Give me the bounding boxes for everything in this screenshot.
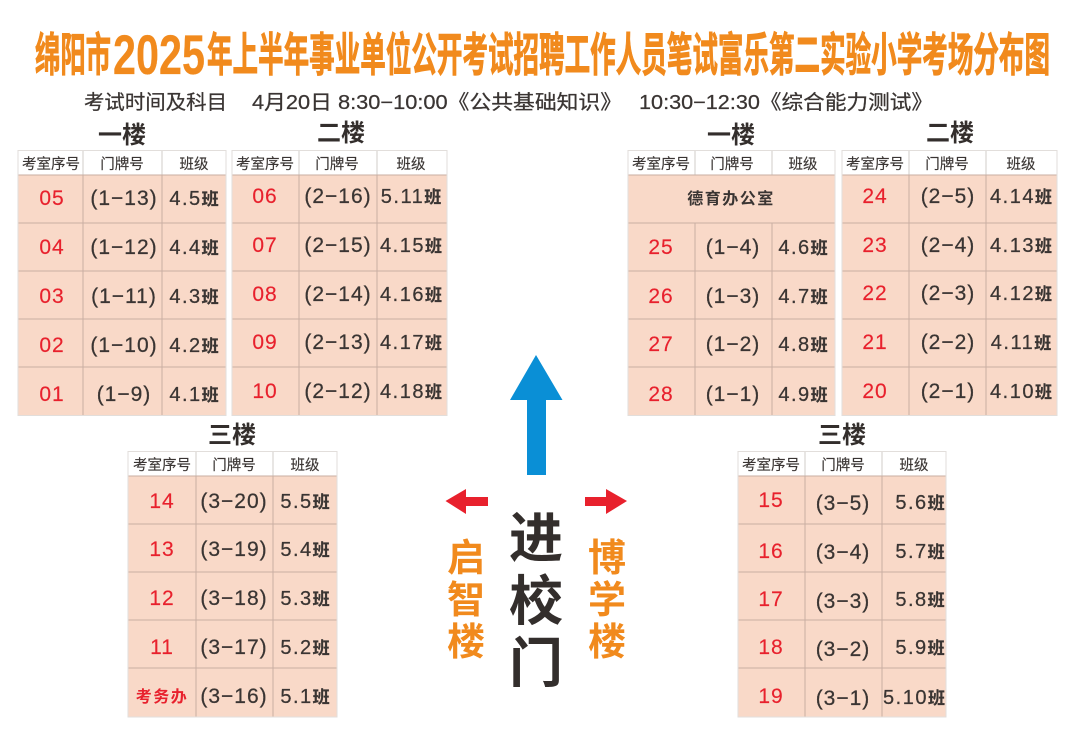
table: floor 1 rooms: 4.1班	[169, 381, 219, 406]
table: floor 2 rooms: 10	[252, 380, 278, 403]
table: floor 2 rooms: 08	[252, 283, 278, 306]
label: school gate: 门	[509, 619, 563, 698]
heading: floor 2: 二楼	[317, 113, 365, 148]
table: floor 2 rooms: (2−12)	[304, 380, 372, 403]
table: floor 3 rooms: 5.8班	[895, 586, 945, 611]
exam time and subjects	[84, 91, 933, 114]
table: floor 3 rooms: 17	[758, 588, 784, 611]
table: floor 3 rooms: 11	[150, 636, 174, 659]
table: floor 3 rooms: 13	[149, 538, 175, 561]
table: floor 2 rooms: 23	[862, 234, 888, 257]
table: floor 1 rooms: (1−4)	[706, 236, 760, 259]
table: floor 3 rooms: 14	[149, 490, 175, 513]
title: 绵阳市	[35, 19, 111, 85]
table: floor 1 rooms: 4.2班	[169, 332, 219, 357]
table: floor 3 rooms: 18	[758, 636, 784, 659]
table: floor 3 rooms: 5.9班	[895, 634, 945, 659]
table: floor 2 rooms: 24	[862, 185, 888, 208]
table: floor 1 rooms: (1−3)	[706, 285, 760, 308]
table: floor 3 rooms: (3−19)	[200, 538, 268, 561]
table: floor 3 rooms: 16	[758, 540, 784, 563]
table: floor 3 rooms: 门牌号	[821, 454, 865, 475]
table: floor 1 rooms: 25	[648, 236, 674, 259]
label: Qizhi building	[447, 527, 485, 666]
table: floor 2 rooms: 4.15班	[380, 232, 442, 257]
table: floor 1 rooms: (1−2)	[706, 333, 760, 356]
panel: east building floor 3	[738, 415, 946, 717]
title: 2025	[113, 23, 205, 86]
table: floor 3 rooms: 考务办	[136, 683, 188, 707]
table: floor 2 rooms: (2−5)	[921, 185, 975, 208]
table: floor 3 rooms: (3−1)	[816, 687, 870, 710]
table: floor 1 rooms: 班级	[788, 153, 818, 174]
table: floor 2 rooms	[232, 150, 447, 416]
label: Qizhi building: 楼	[447, 611, 485, 666]
table: floor 2 rooms: 22	[862, 282, 888, 305]
table: floor 2 rooms: 21	[862, 331, 888, 354]
exam time and subjects: 考试时间及科目	[84, 91, 227, 114]
table: floor 3 rooms: 考室序号	[742, 454, 800, 475]
table: floor 1 rooms: 班级	[180, 153, 208, 174]
table: floor 1 rooms: 4.8班	[778, 331, 828, 356]
table: floor 2 rooms: 4.11班	[991, 329, 1051, 354]
table: floor 1 rooms: 26	[648, 285, 674, 308]
table: floor 3 rooms: (3−3)	[816, 590, 870, 613]
table: floor 1 rooms: (1−1)	[706, 383, 760, 406]
panel: east building floor 1	[628, 115, 835, 416]
table: floor 1 rooms: (1−13)	[90, 187, 158, 210]
table: floor 3 rooms: 考室序号	[133, 454, 191, 475]
label: school gate: 校	[509, 557, 563, 636]
table: floor 2 rooms: 4.13班	[990, 232, 1052, 257]
panel: west building floor 1	[18, 115, 226, 416]
table: floor 3 rooms: 班级	[290, 454, 320, 475]
table: floor 3 rooms: 12	[149, 587, 175, 610]
panel: west building floor 3	[128, 415, 337, 717]
table: floor 3 rooms: (3−2)	[816, 638, 870, 661]
label: Qizhi building: 智	[447, 569, 485, 624]
heading: floor 1: 一楼	[707, 115, 755, 150]
table: floor 1 rooms: 考室序号	[632, 153, 690, 174]
table: floor 1 rooms: (1−12)	[90, 236, 158, 259]
table: floor 2 rooms: 4.14班	[990, 183, 1052, 208]
table: floor 2 rooms: 门牌号	[925, 153, 969, 174]
table: floor 3 rooms: 5.2班	[280, 634, 330, 659]
table: floor 2 rooms: 07	[252, 234, 278, 257]
table: floor 2 rooms: 09	[252, 331, 278, 354]
table: floor 1 rooms: 门牌号	[100, 153, 144, 174]
table: floor 3 rooms: 5.10班	[883, 684, 945, 709]
table: floor 3 rooms: (3−5)	[816, 492, 870, 515]
table: floor 1 rooms: 4.9班	[778, 381, 828, 406]
table: floor 3 rooms: 5.3班	[280, 585, 330, 610]
table: floor 3 rooms: (3−17)	[200, 636, 268, 659]
table: floor 1 rooms: 27	[648, 333, 674, 356]
table: floor 1 rooms: 4.5班	[169, 185, 219, 210]
table: floor 3 rooms	[738, 451, 946, 717]
table: floor 1 rooms: 01	[39, 383, 65, 406]
table: floor 1 rooms: 28	[648, 383, 674, 406]
table: floor 2 rooms: (2−16)	[304, 185, 372, 208]
heading: floor 1: 一楼	[98, 115, 146, 150]
table: floor 1 rooms: 德育办公室	[687, 185, 775, 209]
table: floor 2 rooms: 4.10班	[990, 378, 1052, 403]
table: floor 1 rooms: 考室序号	[22, 153, 80, 174]
table: floor 3 rooms: 19	[758, 685, 784, 708]
table: floor 2 rooms: 5.11班	[381, 183, 441, 208]
table: floor 3 rooms: (3−16)	[200, 685, 268, 708]
table: floor 1 rooms: (1−11)	[91, 285, 157, 308]
table: floor 1 rooms: 04	[39, 236, 65, 259]
heading: floor 3: 三楼	[818, 415, 866, 450]
table: floor 2 rooms: (2−3)	[921, 282, 975, 305]
table: floor 2 rooms: (2−15)	[304, 234, 372, 257]
panel: east building floor 2	[842, 113, 1057, 416]
table: floor 2 rooms: 06	[252, 185, 278, 208]
table: floor 2 rooms	[842, 150, 1057, 416]
table: floor 1 rooms: 02	[39, 334, 65, 357]
table: floor 2 rooms: 班级	[396, 153, 426, 174]
arrow: left to Qizhi building	[446, 489, 488, 514]
table: floor 3 rooms: 5.7班	[895, 538, 945, 563]
label: Qizhi building: 启	[447, 527, 485, 582]
label: school gate	[509, 494, 563, 698]
table: floor 3 rooms: 班级	[900, 454, 928, 475]
table: floor 3 rooms: 15	[758, 489, 784, 512]
table: floor 3 rooms: (3−20)	[200, 490, 268, 513]
table: floor 1 rooms: 4.6班	[778, 234, 828, 259]
table: floor 1 rooms: (1−9)	[97, 383, 151, 406]
table: floor 3 rooms: 5.1班	[280, 683, 330, 708]
heading: floor 3: 三楼	[208, 415, 256, 450]
exam time and subjects: 4月20日 8:30−10:00《公共基础知识》	[252, 91, 622, 114]
table: floor 2 rooms: (2−4)	[921, 234, 975, 257]
table: floor 3 rooms: 门牌号	[212, 454, 256, 475]
label: Boxue building: 楼	[588, 611, 626, 666]
table: floor 3 rooms: 5.4班	[280, 536, 330, 561]
label: school gate: 进	[509, 494, 563, 573]
arrow: straight ahead from school gate	[510, 355, 562, 475]
table: floor 1 rooms	[18, 150, 226, 416]
table: floor 2 rooms: 考室序号	[236, 153, 294, 174]
table: floor 2 rooms: (2−13)	[304, 331, 372, 354]
table: floor 3 rooms: 5.6班	[895, 489, 945, 514]
table: floor 2 rooms: 4.18班	[380, 378, 442, 403]
table: floor 2 rooms: 4.16班	[380, 281, 442, 306]
panel: west building floor 2	[232, 113, 447, 416]
label: Boxue building	[588, 527, 626, 666]
arrow: right to Boxue building	[585, 489, 627, 514]
table: floor 1 rooms: 05	[39, 187, 65, 210]
table: floor 1 rooms: 门牌号	[710, 153, 754, 174]
table: floor 1 rooms	[628, 150, 835, 416]
table: floor 2 rooms: 门牌号	[315, 153, 359, 174]
table: floor 3 rooms: (3−18)	[200, 587, 268, 610]
table: floor 3 rooms	[128, 451, 337, 717]
table: floor 2 rooms: (2−1)	[921, 380, 975, 403]
table: floor 3 rooms: (3−4)	[816, 541, 870, 564]
table: floor 2 rooms: (2−2)	[921, 331, 975, 354]
table: floor 1 rooms: 03	[39, 285, 65, 308]
table: floor 2 rooms: 4.12班	[990, 280, 1052, 305]
table: floor 1 rooms: 4.4班	[169, 234, 219, 259]
table: floor 1 rooms: 4.7班	[778, 283, 828, 308]
table: floor 3 rooms: 5.5班	[280, 488, 330, 513]
table: floor 1 rooms: (1−10)	[90, 334, 158, 357]
table: floor 2 rooms: 考室序号	[846, 153, 904, 174]
label: Boxue building: 学	[588, 569, 626, 624]
table: floor 2 rooms: 20	[862, 380, 888, 403]
exam time and subjects: 10:30−12:30《综合能力测试》	[639, 91, 933, 114]
label: Boxue building: 博	[588, 527, 626, 582]
table: floor 2 rooms: (2−14)	[304, 283, 372, 306]
table: floor 1 rooms: 4.3班	[169, 283, 219, 308]
table: floor 2 rooms: 4.17班	[380, 329, 442, 354]
table: floor 2 rooms: 班级	[1006, 153, 1036, 174]
heading: floor 2: 二楼	[926, 113, 974, 148]
